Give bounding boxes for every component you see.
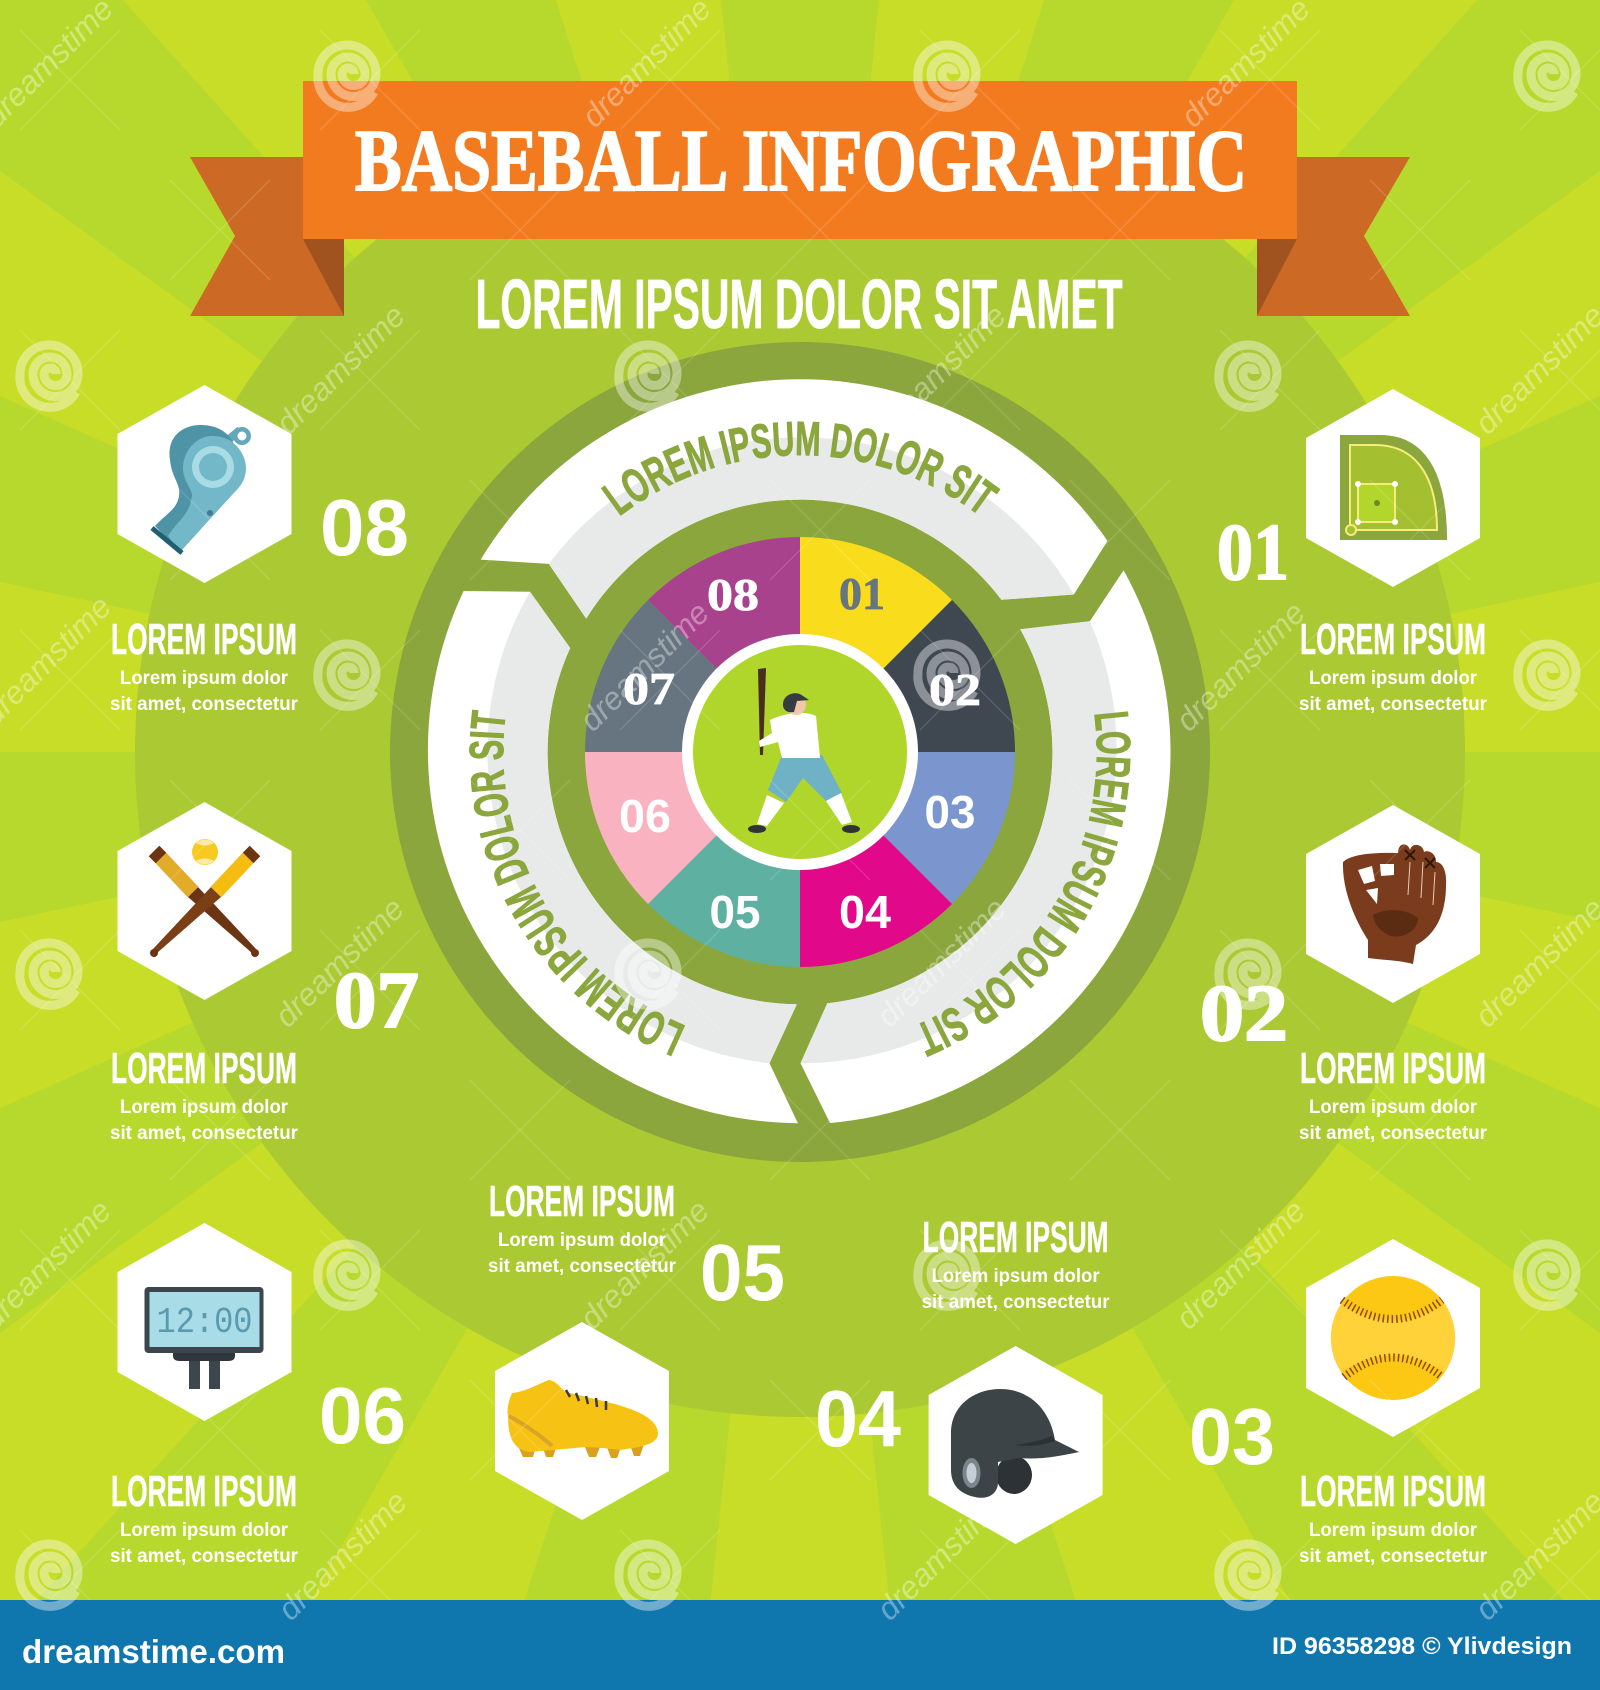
watermark overlay: dreamstime <box>1168 594 1312 738</box>
pie chart: 06 <box>619 790 671 842</box>
description: sit amet, consectetur <box>488 1256 677 1277</box>
watermark overlay: dreamstime <box>268 297 412 441</box>
footer logo: dreamstime.com <box>22 1633 285 1670</box>
left ribbon tail <box>190 157 344 316</box>
number 08: 08 <box>320 483 409 572</box>
right arc segment: LOREM IPSUM DOLOR SIT <box>920 711 1131 1058</box>
description <box>1299 1097 1488 1144</box>
description <box>1299 668 1488 715</box>
pie chart: 08 <box>707 569 759 620</box>
description: sit amet, consectetur <box>110 1546 299 1567</box>
description <box>488 1230 677 1277</box>
icon: scoreboard <box>144 1287 264 1389</box>
number 01: 01 <box>1217 509 1289 597</box>
description: sit amet, consectetur <box>110 1123 299 1144</box>
pie chart: 01 <box>839 568 885 619</box>
heading: LOREM IPSUM <box>489 1177 675 1226</box>
heading: LOREM IPSUM <box>923 1213 1109 1262</box>
number 02: 02 <box>1200 970 1288 1058</box>
description: Lorem ipsum dolor <box>1309 668 1478 689</box>
panel: 01 field <box>1217 389 1488 715</box>
description: sit amet, consectetur <box>922 1292 1110 1313</box>
watermark overlay: dreamstime <box>572 594 716 738</box>
description <box>1299 1520 1488 1567</box>
panel: 03 ball <box>1189 1239 1488 1567</box>
icon: cleat <box>507 1380 658 1458</box>
watermark overlay: dreamstime <box>270 1483 414 1627</box>
description <box>922 1266 1110 1313</box>
watermark overlay: dreamstime <box>1168 1192 1312 1336</box>
icon: helmet <box>951 1389 1079 1498</box>
icon: ball <box>1331 1276 1455 1400</box>
center circle <box>682 634 918 870</box>
number 04: 04 <box>815 1374 901 1463</box>
right arc segment <box>800 570 1170 1123</box>
subtitle: LOREM IPSUM DOLOR SIT AMET <box>476 265 1122 343</box>
description: sit amet, consectetur <box>110 694 299 715</box>
large backdrop circle <box>135 87 1465 1417</box>
watermark overlay: dreamstime <box>572 1192 716 1336</box>
top arc segment <box>480 379 1108 619</box>
right ribbon tail <box>1257 157 1410 316</box>
description: Lorem ipsum dolor <box>120 1097 289 1118</box>
heading: LOREM IPSUM <box>111 1044 297 1093</box>
pie chart <box>585 537 1015 967</box>
pie chart: 03 <box>924 786 976 838</box>
number 03: 03 <box>1189 1392 1275 1481</box>
description: Lorem ipsum dolor <box>1309 1097 1478 1118</box>
description <box>110 1520 299 1567</box>
pie chart: 04 <box>839 886 891 938</box>
description: Lorem ipsum dolor <box>120 668 289 689</box>
watermark overlay: dreamstime <box>267 890 411 1034</box>
number 05: 05 <box>700 1228 785 1317</box>
central ring diagram <box>390 342 1210 1162</box>
heading: LOREM IPSUM <box>111 615 297 664</box>
icon: whistle <box>152 425 251 553</box>
number 06: 06 <box>319 1371 406 1460</box>
ribbon banner <box>303 81 1297 239</box>
icon: baseball field <box>1340 435 1447 540</box>
watermark overlay: dreamstime <box>869 1483 1013 1627</box>
footer bar <box>0 1600 1600 1690</box>
top arc segment: LOREM IPSUM DOLOR SIT <box>600 421 1000 516</box>
left arc segment <box>428 591 798 1124</box>
watermark overlay: dreamstime <box>869 890 1013 1034</box>
panel: 05 shoe <box>488 1177 785 1520</box>
icon: crossed bats <box>150 839 259 957</box>
pie chart: 05 <box>710 886 760 938</box>
description: sit amet, consectetur <box>1299 1546 1488 1567</box>
panel: 06 scoreboard <box>110 1223 406 1567</box>
footer credit: ID 96358298 © Ylivdesign <box>1272 1633 1572 1660</box>
description: Lorem ipsum dolor <box>498 1230 667 1251</box>
description: sit amet, consectetur <box>1299 694 1488 715</box>
pie chart: 07 <box>623 663 675 714</box>
panel: 08 whistle <box>110 385 409 715</box>
left arc segment: LOREM IPSUM DOLOR SIT <box>469 710 686 1056</box>
watermark overlay: dreamstime <box>869 297 1013 441</box>
panel: 04 helmet <box>815 1213 1110 1544</box>
icon: batter <box>748 668 860 833</box>
description <box>110 1097 299 1144</box>
description: Lorem ipsum dolor <box>120 1520 289 1541</box>
panel: 02 glove <box>1200 805 1488 1144</box>
description <box>110 668 299 715</box>
outer dark ring <box>390 342 1210 1162</box>
icon: glove <box>1343 844 1446 964</box>
title: BASEBALL INFOGRAPHIC <box>355 113 1247 210</box>
description: Lorem ipsum dolor <box>1309 1520 1478 1541</box>
description: Lorem ipsum dolor <box>932 1266 1100 1287</box>
icon: scoreboard: 12:00 <box>156 1302 252 1343</box>
description: sit amet, consectetur <box>1299 1123 1488 1144</box>
pie chart: 02 <box>929 664 981 715</box>
number 07: 07 <box>334 957 419 1045</box>
heading: LOREM IPSUM <box>111 1467 297 1516</box>
panel: 07 bats <box>110 802 419 1144</box>
